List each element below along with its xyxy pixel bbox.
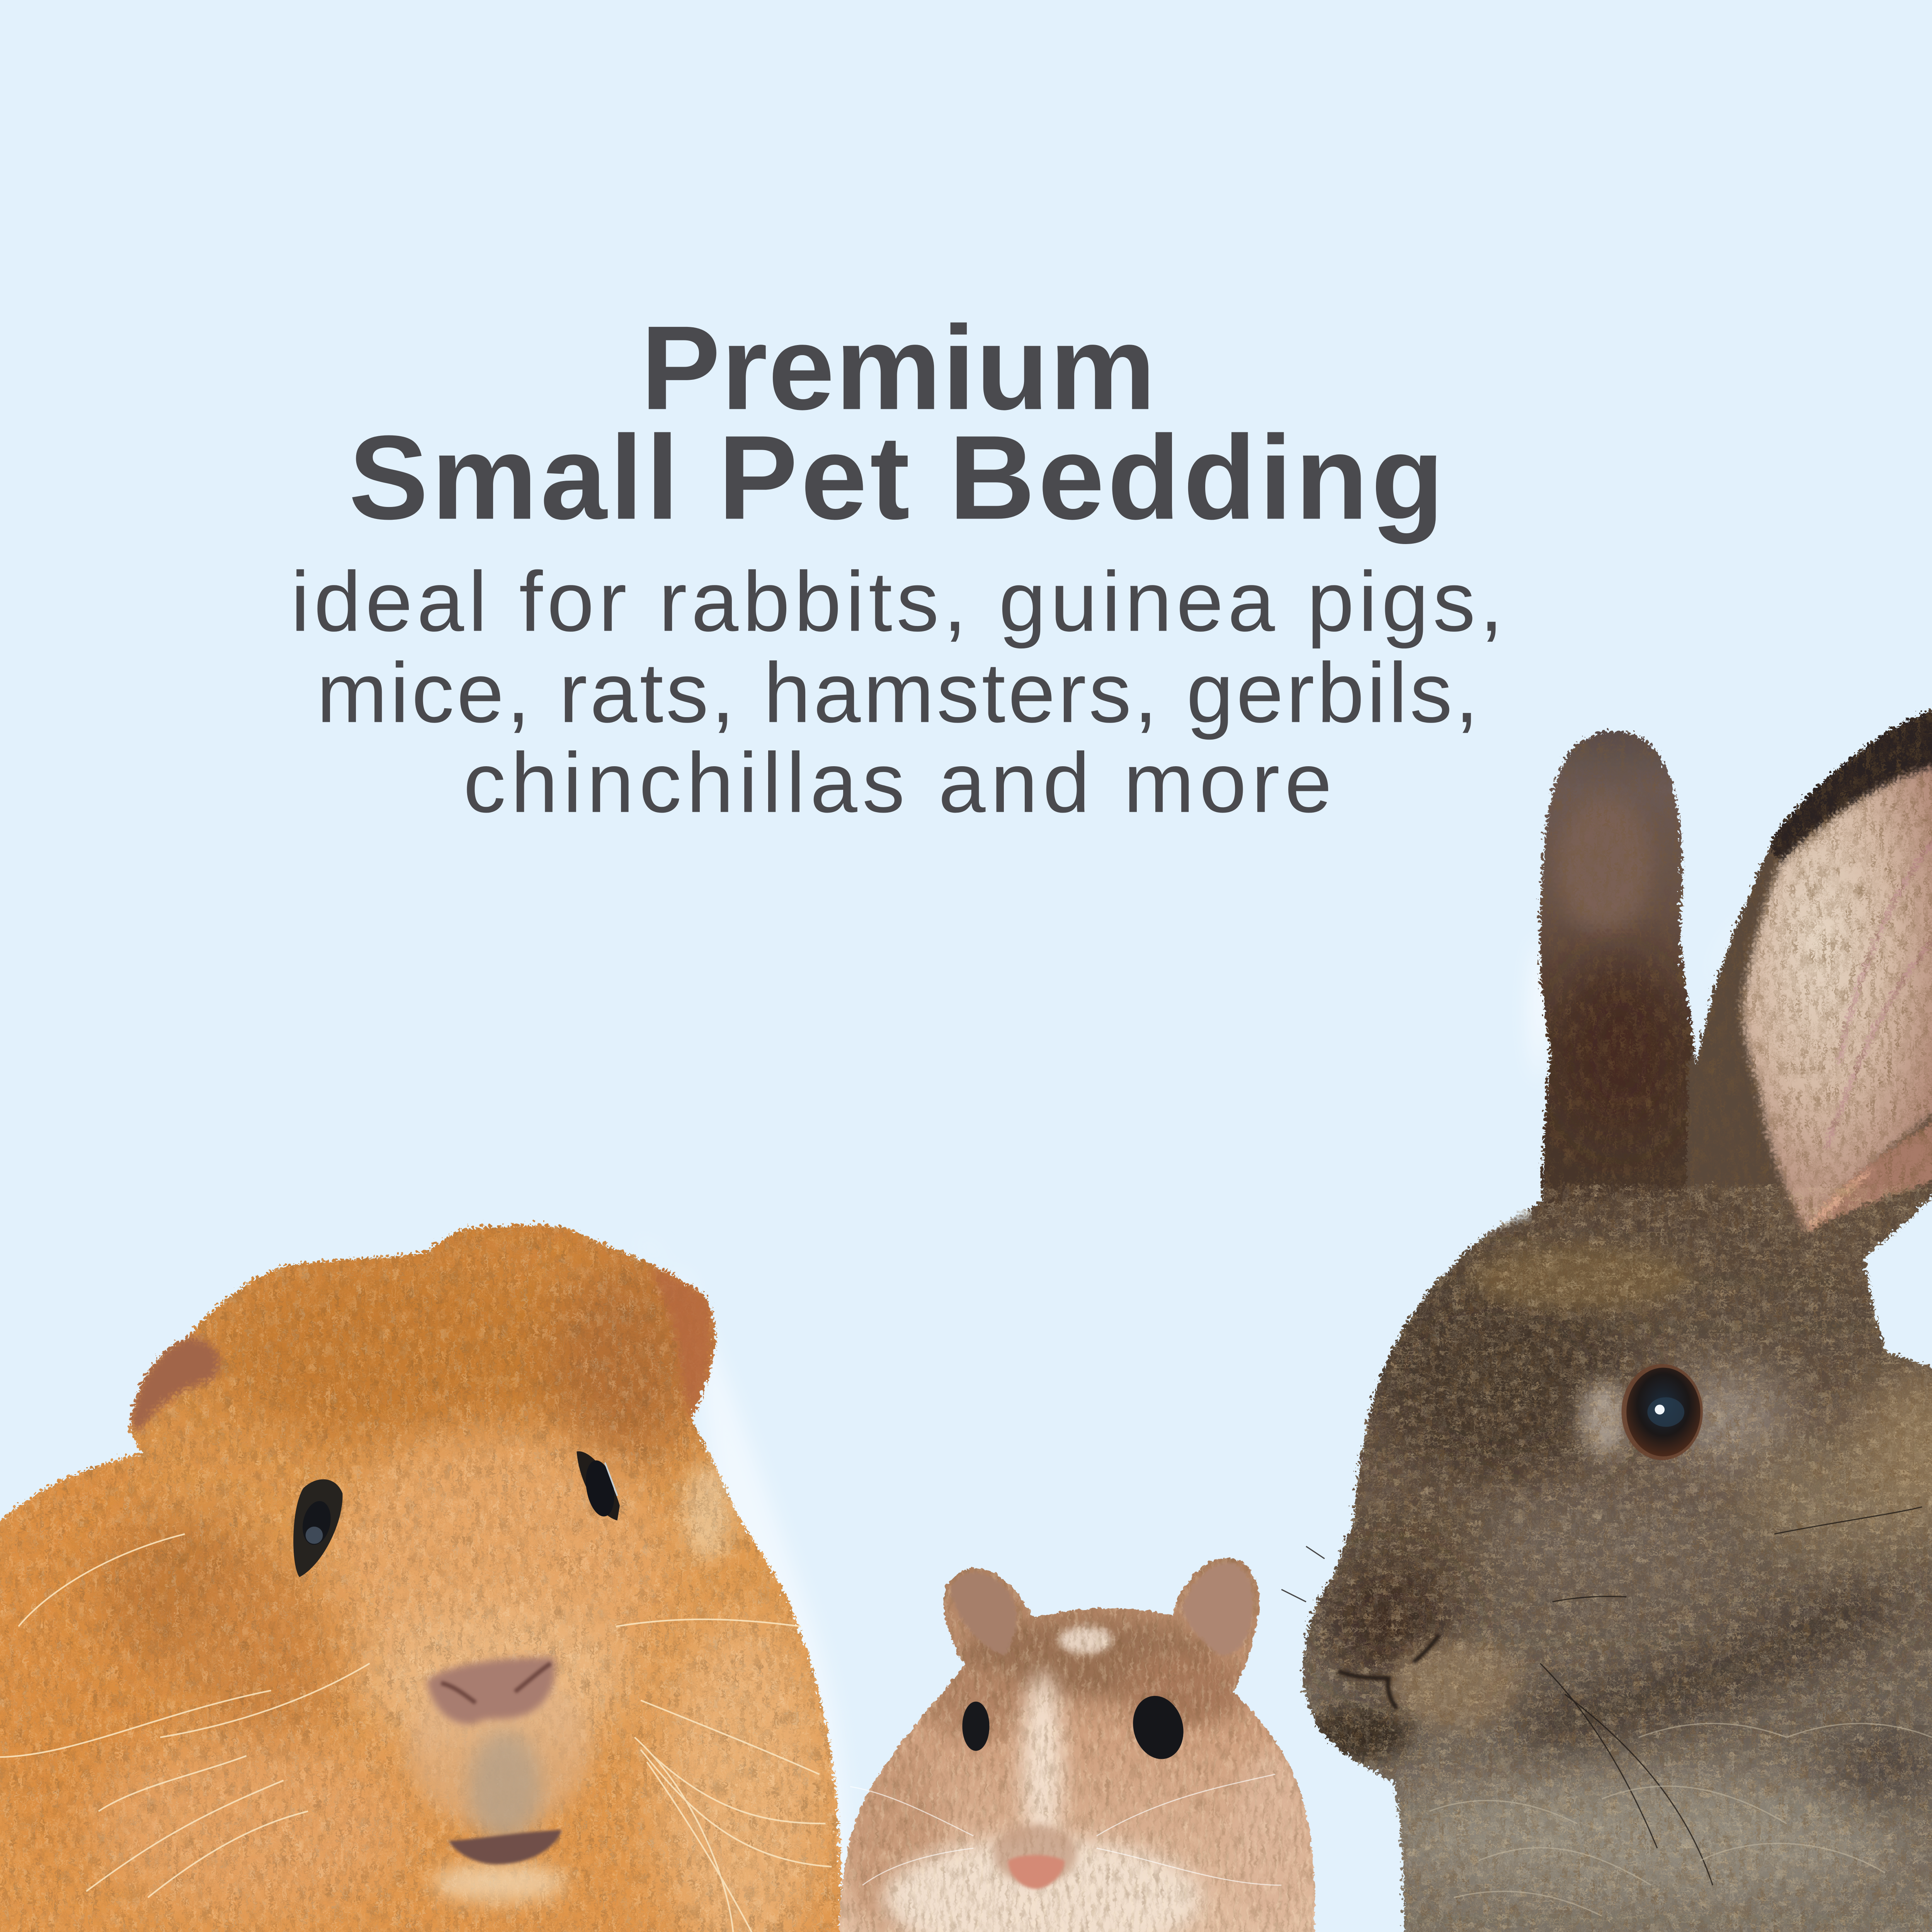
title: Premium Small Pet Bedding [349,301,1444,545]
hamster right eye [1126,1690,1190,1765]
subtitle: animals list: mice, rats, hamsters, gerbils, [317,645,1479,740]
rabbit nostril and mouth [1338,1635,1439,1709]
left ear [127,1334,218,1427]
hamster right ear [1180,1561,1252,1653]
subtitle: animals list: ideal for rabbits, guinea pigs, [291,554,1503,649]
rabbit head [1281,1189,1932,1932]
rabbit ear inner [1740,758,1932,1230]
hamster whiskers [850,1774,1281,1885]
hamster left eye [962,1702,990,1751]
right ear [647,1263,710,1417]
nose [426,1657,555,1724]
illustration: rabbit [1281,678,1932,1932]
left eye [293,1479,343,1577]
hamster nose [993,1825,1077,1889]
title: Premium Small Pet Bedding: Small Pet Bedding [349,410,1444,545]
headline and sub-copy [291,301,1503,830]
illustration: guinea pig [0,1208,850,1932]
hamster left ear [949,1571,1015,1653]
mouth [449,1830,562,1864]
title: Premium Small Pet Bedding: Premium [641,301,1156,435]
rabbit whiskers [1281,1507,1922,1885]
subtitle: animals list [291,554,1503,830]
muzzle [406,1670,592,1902]
illustration: hamster [825,1546,1331,1932]
rabbit fur patches [1368,1269,1626,1479]
rabbit back ear [1528,721,1701,1263]
rabbit eye [1621,1364,1703,1460]
right eye [577,1451,620,1520]
whiskers [0,1534,832,1932]
rabbit neck fur strands [1429,1723,1932,1916]
subtitle: animals list: chinchillas and more [463,735,1332,830]
rabbit front ear outer [1682,678,1932,1392]
